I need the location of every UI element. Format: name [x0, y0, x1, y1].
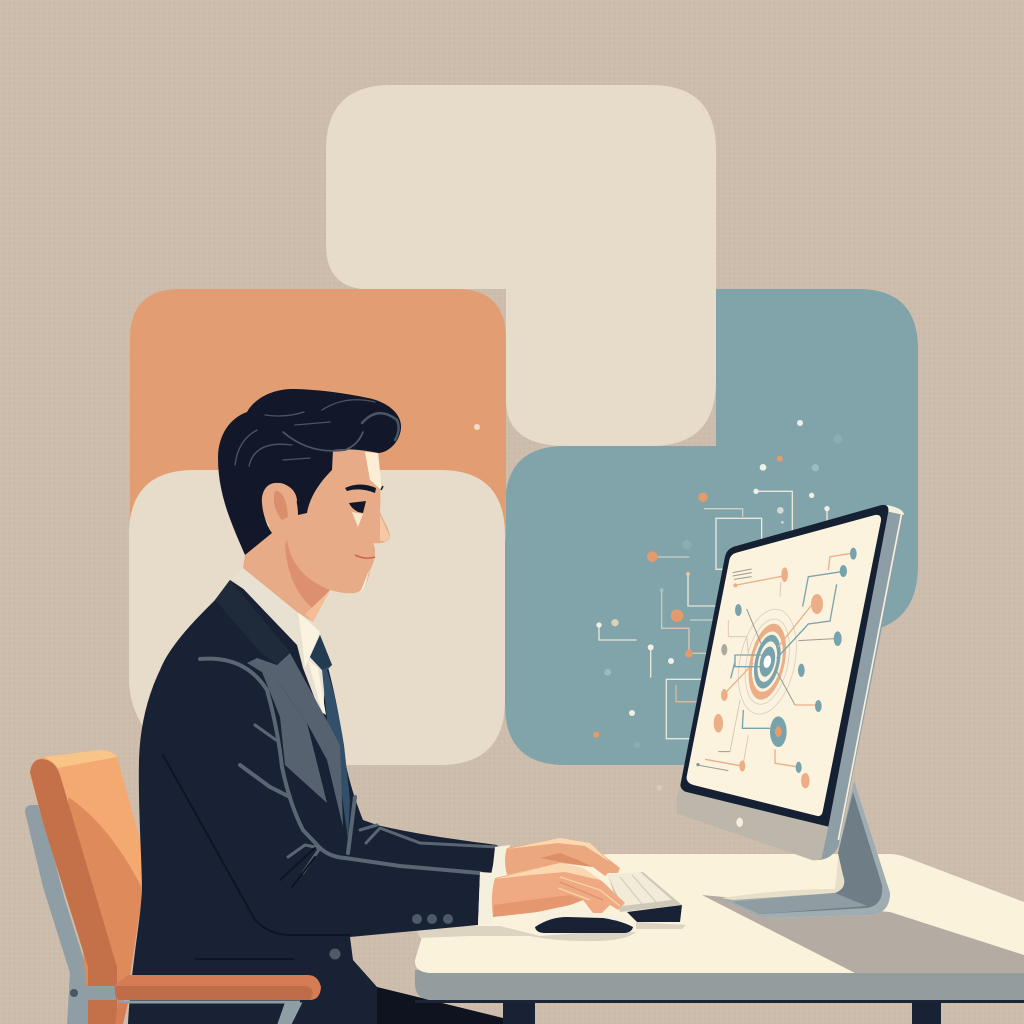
desk	[415, 854, 1024, 1024]
panel: orange block	[130, 289, 506, 540]
concentric target	[730, 604, 805, 720]
chair arm bracket	[70, 986, 116, 1000]
desk legs	[503, 1000, 941, 1024]
chair frame	[25, 805, 88, 1024]
chair	[25, 750, 143, 1024]
eyebrow and eye	[345, 484, 376, 493]
network diagram on screen	[696, 548, 857, 788]
chair armrest	[115, 975, 321, 1024]
person: suit jacket	[128, 580, 497, 1024]
monitor bezel	[680, 505, 888, 827]
lower hand	[492, 863, 625, 917]
mouse	[535, 905, 636, 934]
monitor stand	[720, 780, 890, 918]
dot on orange block	[474, 424, 480, 430]
panel: cream lower block	[129, 470, 505, 765]
trousers	[300, 960, 503, 1024]
tie	[310, 635, 350, 840]
jacket lapel	[247, 653, 343, 827]
panel: blue rounded block	[505, 289, 918, 765]
upper hand	[505, 838, 620, 876]
hair strands	[235, 400, 399, 466]
forehead highlight	[365, 452, 381, 490]
ear	[262, 483, 297, 535]
shirt collar	[233, 568, 325, 720]
hands and cuffs	[478, 838, 636, 934]
desk shadow	[702, 895, 1024, 973]
upper cuff	[492, 845, 510, 875]
chair back	[30, 750, 143, 1024]
keyboard	[608, 872, 682, 922]
jacket highlights and folds	[163, 659, 497, 959]
desk front edge	[415, 968, 1024, 1000]
person: neck and head	[218, 389, 401, 622]
monitor chin	[677, 788, 828, 860]
monitor side edge	[818, 505, 904, 860]
monitor screen	[687, 515, 881, 816]
lower cuff	[478, 872, 495, 925]
hair	[218, 389, 401, 555]
monitor	[677, 505, 904, 860]
neck shadow	[285, 540, 330, 611]
desk top	[415, 854, 1024, 973]
mouth	[355, 555, 375, 558]
panel: cream top block	[326, 85, 716, 446]
sleeve buttons	[330, 914, 453, 960]
floating network nodes and connector lines	[593, 420, 842, 790]
